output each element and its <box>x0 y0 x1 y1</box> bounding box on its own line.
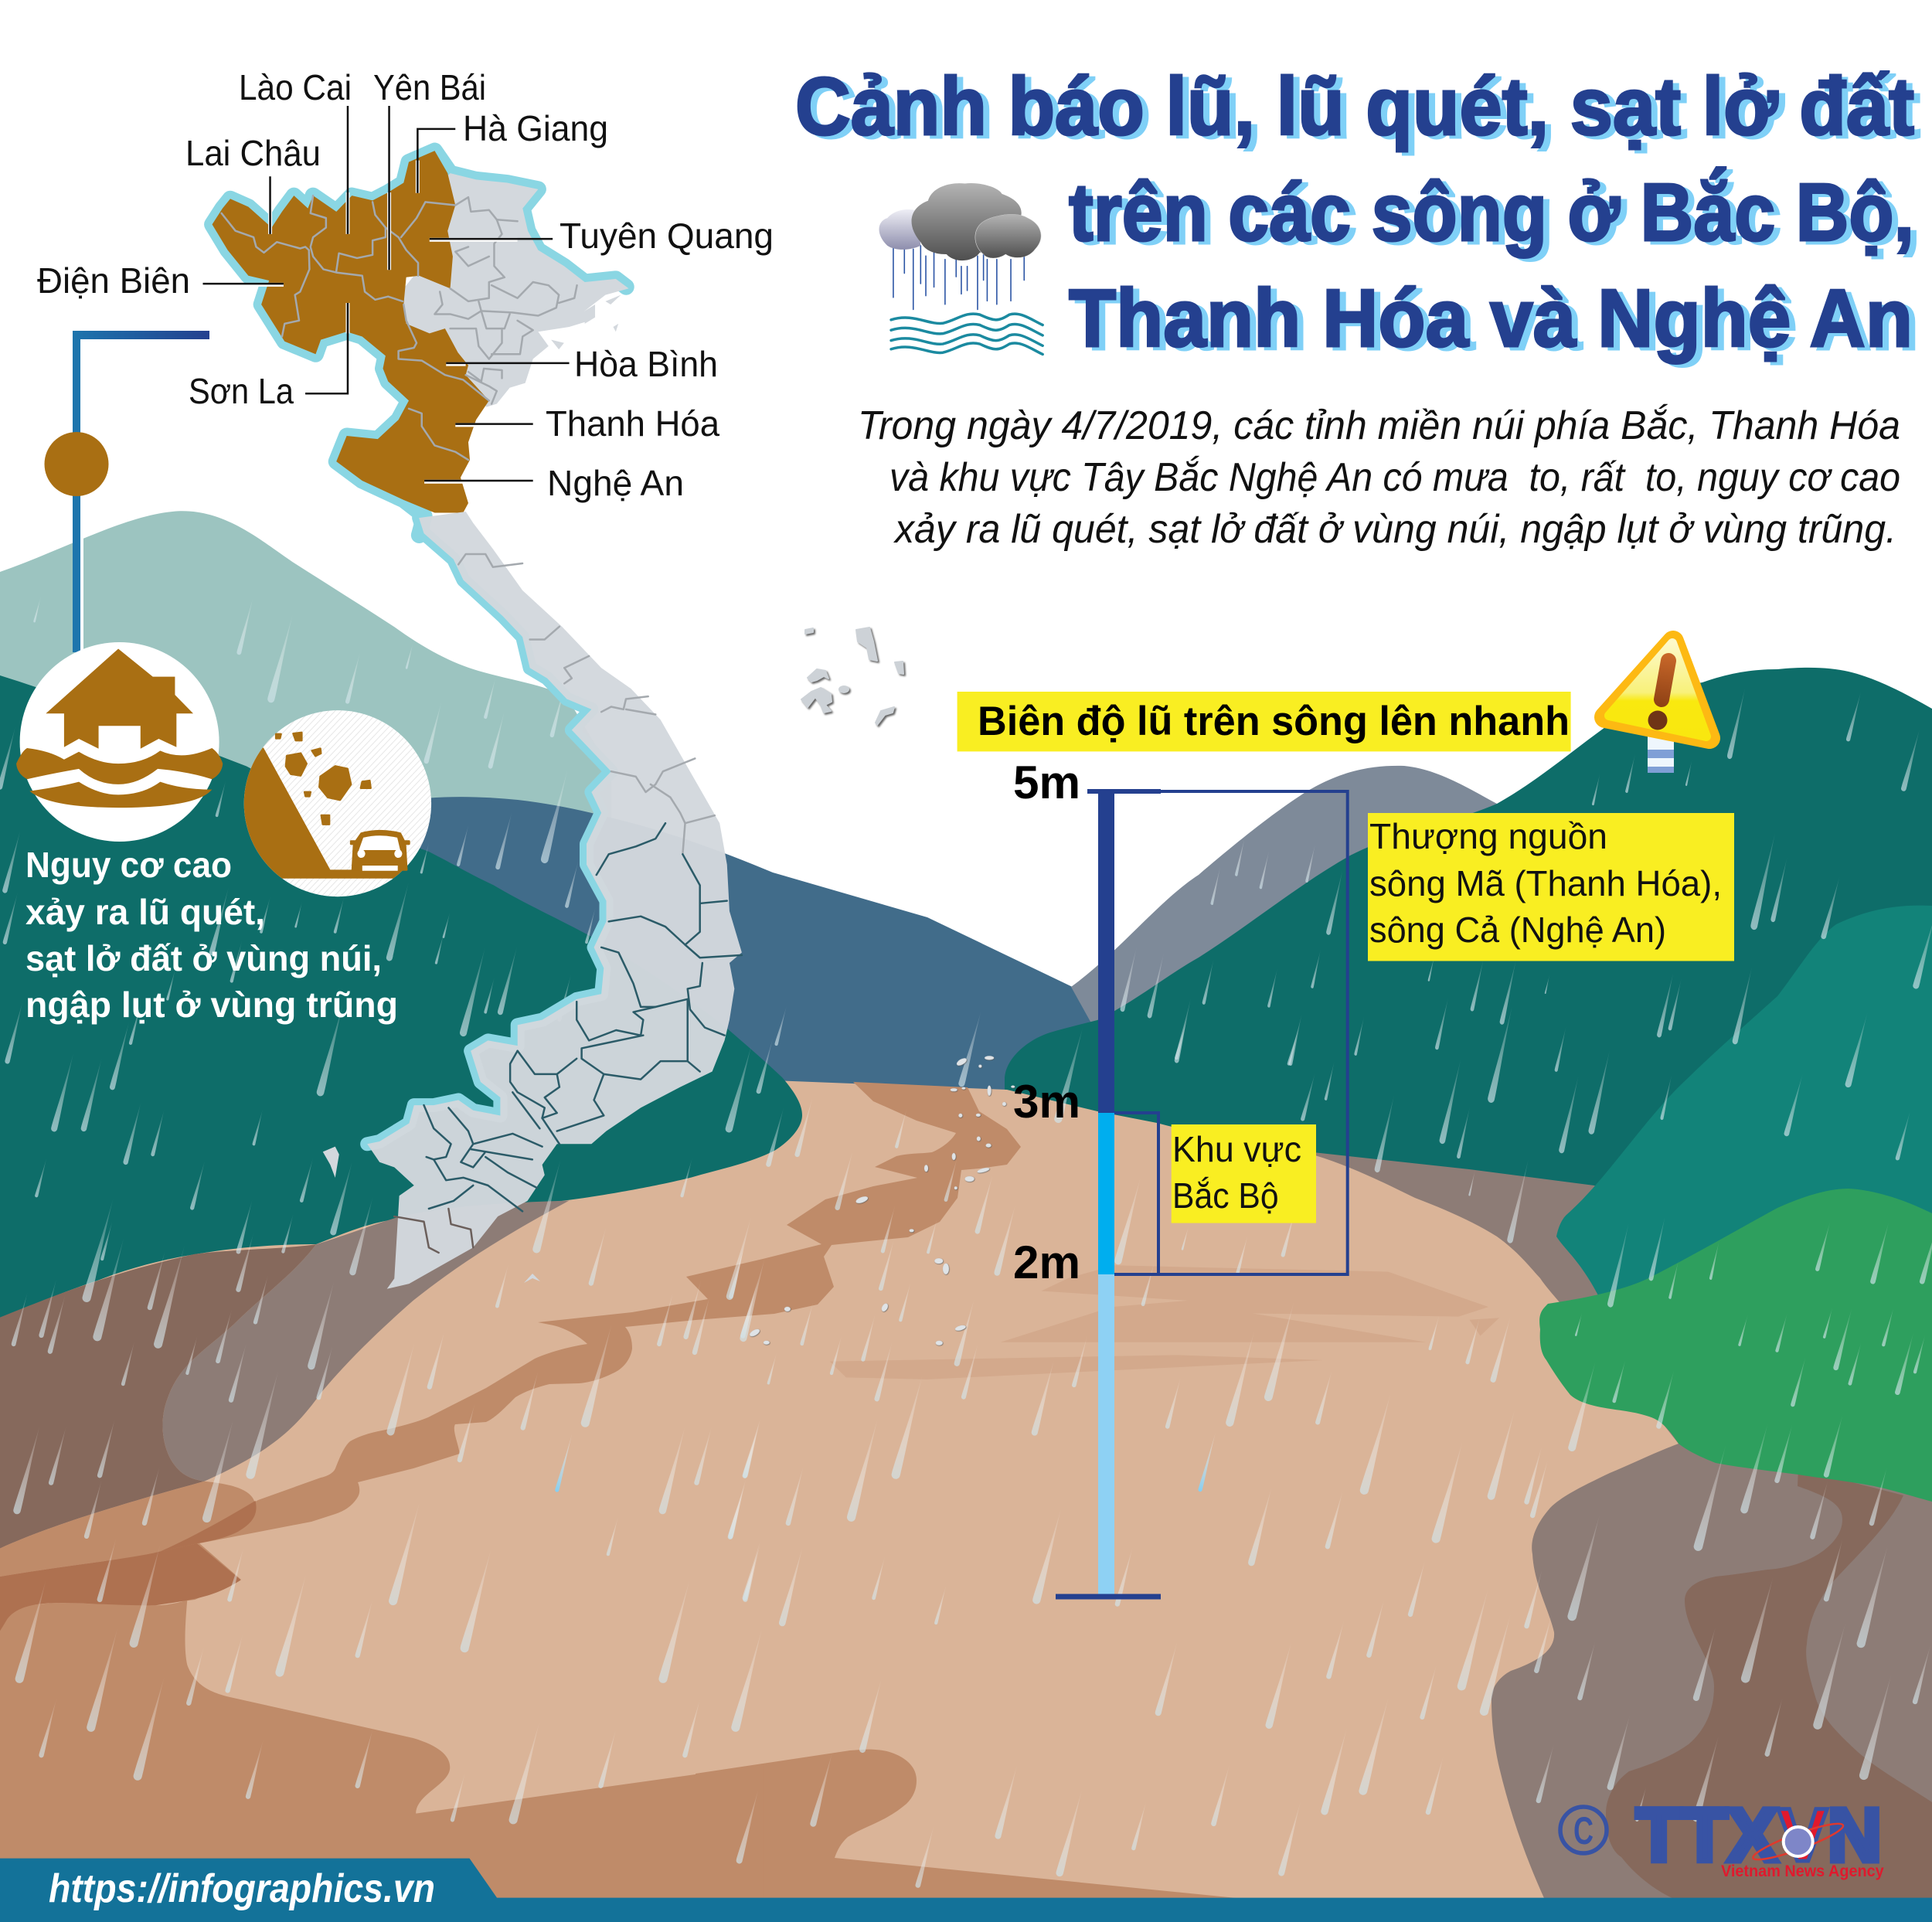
callout: upstream rivers <box>1368 813 1734 961</box>
darker river overlap <box>0 1543 241 1631</box>
hill: green <box>1539 1189 1932 1502</box>
logo: TTXVN <box>1560 1793 1884 1880</box>
map leader lines <box>202 106 570 481</box>
copyright mark <box>1560 1807 1607 1853</box>
icon: landslide and car <box>236 710 434 896</box>
hill: right teal <box>1556 906 1932 1352</box>
rocky strip behind ground <box>1306 1151 1700 1468</box>
island: Phu Quoc <box>323 1147 339 1178</box>
icon: flooded house <box>16 642 223 842</box>
mountain: pale teal <box>0 511 611 866</box>
map province labels: Nghệ An <box>547 463 684 503</box>
callout: northern region <box>1172 1124 1316 1223</box>
risk text: sạt lở đất ở vùng núi, <box>26 938 382 978</box>
gauge values <box>1013 757 1080 1288</box>
brown band <box>0 1481 255 1577</box>
connector node <box>45 432 108 496</box>
map province labels: Tuyên Quang <box>560 216 774 256</box>
callout: upstream rivers: Thượng nguồn <box>1369 816 1607 856</box>
rocky ground: left grey <box>162 1201 570 1481</box>
province lines: south <box>394 823 742 1253</box>
map province labels: Thanh Hóa <box>546 403 719 444</box>
gauge scale bar <box>1056 789 1161 1600</box>
gauge values: 2m <box>1013 1237 1080 1288</box>
car <box>351 831 409 869</box>
province lines: north <box>222 196 577 460</box>
map province labels: Hà Giang <box>463 108 608 148</box>
footer band <box>0 1859 1932 1922</box>
map province labels: Lào Cai <box>239 67 352 107</box>
map province labels <box>37 67 774 503</box>
intro text: Trong ngày 4/7/2019, các tỉnh miền núi phía Bắc, Thanh Hóa <box>858 403 1900 448</box>
risk text: xảy ra lũ quét, <box>26 892 265 932</box>
sand dunes <box>830 1265 1499 1379</box>
brackets <box>1114 791 1348 1274</box>
map province labels: Hòa Bình <box>574 344 718 384</box>
highlighted provinces in brown <box>213 151 489 512</box>
risk text: ngập lụt ở vùng trũng <box>26 985 398 1025</box>
risk text <box>26 845 398 1025</box>
gauge values: 5m <box>1013 757 1080 808</box>
risk text: Nguy cơ cao <box>26 845 232 885</box>
rain drops <box>0 596 1932 1889</box>
province lines: central <box>458 554 715 854</box>
chart: flood amplitude gauge <box>1013 757 1734 1600</box>
dark stream: right <box>1606 1468 1932 1898</box>
north-east coast islets <box>551 295 621 349</box>
island: Con Dao <box>524 1274 540 1283</box>
islands: Truong Sa <box>749 1056 1015 1345</box>
map province labels: Lai Châu <box>185 133 321 173</box>
website url: https://infographics.vn <box>49 1866 435 1911</box>
callout: upstream rivers: sông Mã (Thanh Hóa), <box>1369 863 1722 903</box>
north-east provinces <box>399 173 629 407</box>
map province labels: Điện Biên <box>37 260 190 301</box>
large brown foreground <box>0 1600 763 1922</box>
callout: northern region: Khu vực <box>1172 1129 1301 1169</box>
brown foreground: centre bottom <box>696 1750 1236 1898</box>
intro text: xảy ra lũ quét, sạt lở đất ở vùng núi, ngập lụt ở vùng trũng. <box>893 507 1896 552</box>
islands: Hoang Sa <box>801 628 903 725</box>
map province labels: Sơn La <box>189 371 294 411</box>
mountain: grey blue peak <box>1071 766 1497 1036</box>
border line: south <box>367 518 611 1144</box>
icon: storm cloud with rain and waves <box>879 183 1043 354</box>
mountain: right dark teal <box>1005 668 1932 1352</box>
central and southern provinces <box>367 512 742 1289</box>
gauge values: 3m <box>1013 1076 1080 1128</box>
sandy ground <box>0 1077 1679 1922</box>
mountain: left dark teal <box>0 675 802 1318</box>
agency wordmark: TTXVN <box>1636 1793 1882 1877</box>
chart heading: Biên độ lũ trên sông lên nhanh <box>978 699 1570 744</box>
callout: upstream rivers: sông Cả (Nghệ An) <box>1369 910 1666 950</box>
rocky ground: left dark <box>0 1244 316 1549</box>
map province labels: Yên Bái <box>373 67 486 107</box>
border line: north <box>213 151 626 535</box>
mountain: slate blue <box>386 797 1098 1097</box>
callout: northern region: Bắc Bộ <box>1172 1175 1279 1216</box>
muddy river <box>0 1082 1021 1631</box>
blue connector line <box>45 331 209 652</box>
icon: warning sign <box>1605 641 1709 773</box>
title <box>795 61 1914 364</box>
globe and orbit <box>1750 1818 1845 1866</box>
map of Vietnam <box>213 151 1015 1345</box>
intro text <box>858 403 1900 552</box>
rocky ground: right <box>1492 1391 1932 1898</box>
copyright mark: C <box>1573 1809 1594 1852</box>
agency name: Vietnam News Agency <box>1721 1862 1884 1880</box>
